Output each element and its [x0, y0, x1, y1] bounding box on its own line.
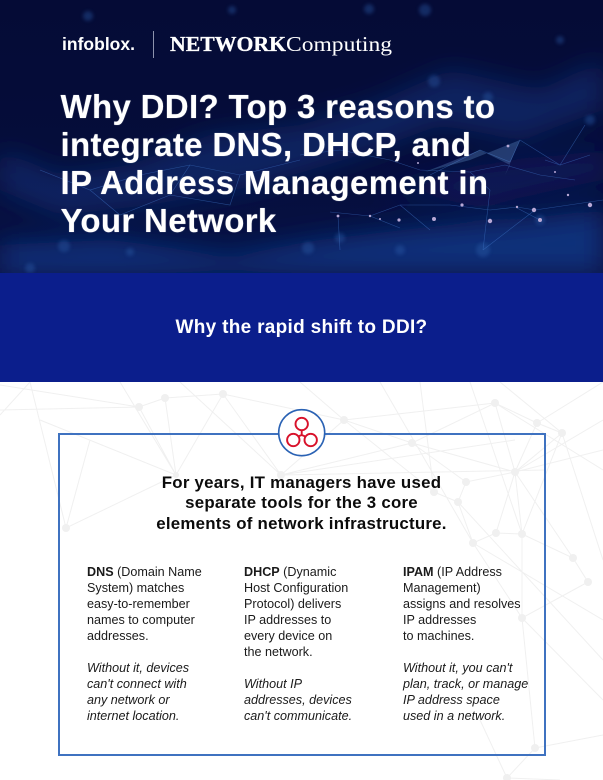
column: DHCP: Without IP — [244, 677, 302, 691]
column: DHCP: can't communicate. — [244, 709, 352, 723]
logo: Network Computing: Computing — [286, 32, 392, 56]
column: DHCP: IP addresses to — [244, 613, 331, 627]
blue band — [0, 273, 603, 382]
column: DNS: System) matches — [87, 581, 184, 595]
column: IPAM: to machines. — [403, 629, 474, 643]
panel heading — [156, 472, 447, 532]
title: integrate DNS, DHCP, and — [60, 126, 471, 162]
column: DNS: any network or — [87, 693, 170, 707]
column: IPAM: used in a network. — [403, 709, 505, 723]
logo divider — [153, 31, 154, 58]
panel heading: separate tools for the 3 core — [185, 493, 418, 512]
column: DNS — [87, 565, 202, 723]
column: IPAM: Without it, you can't — [403, 661, 512, 675]
column: IPAM: plan, track, or manage — [403, 677, 528, 691]
column: DHCP: every device on — [244, 629, 332, 643]
column: DNS: Without it, devices — [87, 661, 189, 675]
panel: core elements — [58, 433, 546, 756]
column: IPAM: IP addresses — [403, 613, 476, 627]
column: DNS: names to computer — [87, 613, 195, 627]
column: IPAM: IPAM (IP Address — [403, 565, 502, 579]
column: DHCP: the network. — [244, 645, 313, 659]
panel heading: elements of network infrastructure. — [156, 514, 447, 532]
column: DHCP: addresses, devices — [244, 693, 352, 707]
column: IPAM: assigns and resolves — [403, 597, 521, 611]
column: DNS: can't connect with — [87, 677, 187, 691]
column: DNS: internet location. — [87, 709, 179, 723]
column: IPAM — [402, 565, 528, 723]
band heading: Why the rapid shift to DDI? — [176, 317, 427, 338]
title: Your Network — [60, 202, 277, 238]
icon: three linked circles — [278, 408, 326, 456]
column: DHCP: Protocol) delivers — [244, 597, 341, 611]
column: DHCP — [244, 565, 352, 723]
column: DNS: addresses. — [87, 629, 149, 643]
column: DHCP: DHCP (Dynamic — [244, 565, 336, 579]
title: IP Address Management in — [60, 164, 488, 200]
title — [60, 88, 495, 238]
background network pattern — [0, 382, 603, 780]
column: IPAM: Management) — [403, 581, 481, 595]
panel heading: For years, IT managers have used — [162, 472, 441, 492]
column: DHCP: Host Configuration — [244, 581, 348, 595]
logo: Network Computing — [170, 32, 392, 56]
column: DNS: DNS (Domain Name — [87, 565, 202, 579]
logo: Network Computing: NETWORK — [170, 32, 286, 56]
title: Why DDI? Top 3 reasons to — [60, 88, 495, 124]
column: IPAM: IP address space — [403, 693, 500, 707]
header background: network image — [0, 0, 603, 273]
column: DNS: easy-to-remember — [87, 597, 190, 611]
